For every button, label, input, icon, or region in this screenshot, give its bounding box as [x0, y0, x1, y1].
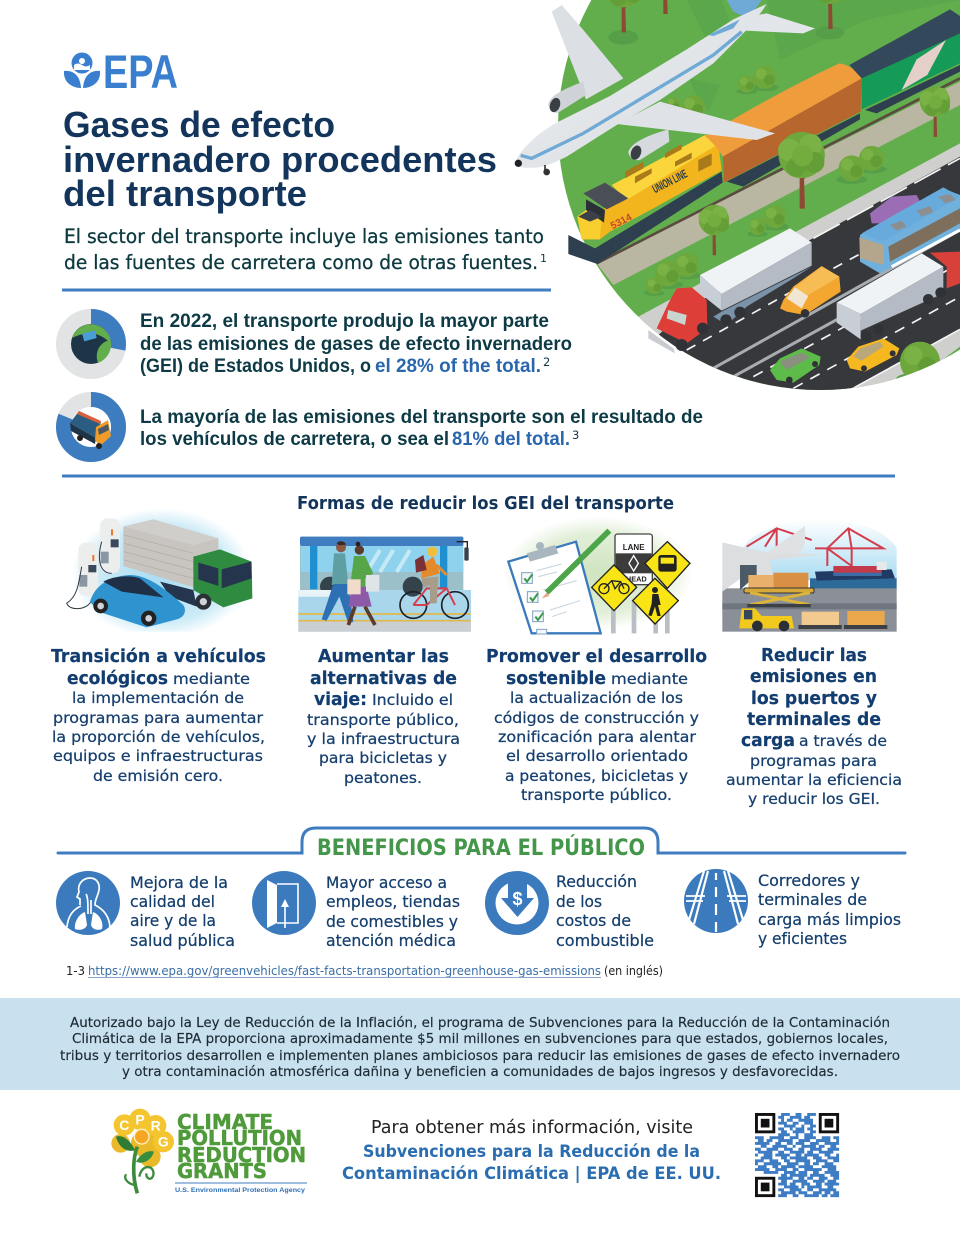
illustration: sustainable development: AHEAD	[621, 575, 647, 584]
benefit 3 text: Reducción	[556, 872, 637, 891]
CPRG wordmark: U.S. Environmental Protection Agency	[175, 1187, 305, 1194]
column 4 text: programas para	[750, 752, 877, 770]
column 2 text: peatones.	[344, 769, 422, 787]
stat 1 text: el 28% of the total.	[375, 356, 541, 377]
illustration: alternatives with bus, walkers and cyclist	[298, 537, 471, 632]
locomotive	[568, 135, 723, 264]
more information text: Contaminación Climática | EPA de EE. UU.	[342, 1164, 721, 1184]
title	[63, 104, 497, 214]
stat 2 text: los vehículos de carretera, o sea el	[140, 429, 449, 450]
benefit 4 text	[758, 871, 901, 948]
bus	[859, 187, 960, 273]
benefit 2 text: atención médica	[326, 931, 456, 950]
illustration: ports and terminals	[722, 519, 897, 632]
benefit 3 text: de los	[556, 892, 602, 911]
CPRG wordmark	[175, 1110, 307, 1194]
CPRG flower logo: R	[151, 1118, 161, 1134]
stat 1 text: (GEI) de Estados Unidos, o	[140, 356, 371, 377]
more information text: Subvenciones para la Reducción de la	[363, 1142, 700, 1162]
illustration: transportation scene circle	[515, 0, 960, 393]
funding note band	[0, 998, 960, 1090]
icon: dollar down arrow: $	[512, 889, 523, 909]
illustration: electric vehicles	[67, 508, 257, 642]
icon: lungs and head	[56, 871, 120, 935]
truck 1	[648, 228, 812, 353]
title: invernadero procedentes	[63, 139, 497, 180]
illustration: sustainable development	[497, 517, 697, 643]
funding note band: Climática de la EPA proporciona aproximadamente $5 mil millones en subvenciones para que estados, gobiernos locales,	[72, 1031, 888, 1047]
benefits header tab: BENEFICIOS PARA EL PÚBLICO	[317, 833, 645, 861]
column 2 text: Aumentar las	[318, 647, 449, 667]
subtitle: 1	[540, 252, 547, 265]
subtitle: El sector del transporte incluye las emisiones tanto	[64, 225, 544, 248]
stat 1 text: En 2022, el transporte produjo la mayor parte	[140, 311, 549, 332]
icon: open door with arrow	[252, 871, 316, 935]
EPA logo: EPA	[103, 45, 178, 98]
CPRG wordmark: REDUCTION	[177, 1143, 306, 1167]
benefit 3 text	[556, 872, 654, 950]
illustration: sustainable development: LANE	[623, 543, 645, 552]
CPRG wordmark: GRANTS	[177, 1159, 267, 1183]
stat 1 donut	[64, 316, 118, 372]
benefit 2 text: de comestibles y	[326, 912, 458, 931]
CPRG wordmark: POLLUTION	[177, 1126, 302, 1150]
column 2 text: y la infraestructura	[307, 730, 460, 748]
benefit 1 text	[130, 873, 235, 950]
more information text	[342, 1118, 721, 1184]
icon: highway	[684, 869, 748, 933]
column 4 text: terminales de	[747, 710, 881, 730]
CPRG flower logo: G	[158, 1134, 169, 1150]
column 1 text: mediante	[173, 670, 250, 688]
road	[657, 157, 960, 393]
stat 1 text: 2	[543, 355, 550, 369]
funding note band: y otra contaminación atmosférica dañina y beneficien a comunidades de bajos ingresos y desfavorecidas.	[122, 1064, 838, 1080]
column 3 text: la actualización de los	[510, 689, 683, 707]
sidewalk	[638, 143, 960, 337]
column 3 text: sostenible	[506, 669, 606, 689]
benefit 4 text: terminales de	[758, 890, 867, 909]
car: yellow	[847, 338, 899, 372]
column 4 text: y reducir los GEI.	[748, 790, 880, 808]
footnote: https://www.epa.gov/greenvehicles/fast-facts-transportation-greenhouse-gas-emissions	[88, 964, 601, 978]
stat 2 text	[140, 407, 703, 450]
benefits header tab	[58, 828, 905, 861]
stat 1 text	[140, 311, 572, 377]
column 4 text: carga	[741, 731, 795, 751]
benefit 1 text: aire y de la	[130, 911, 216, 930]
column 4 text: aumentar la eficiencia	[726, 771, 902, 789]
benefit 3 text: combustible	[556, 931, 654, 950]
column 3 text: el desarrollo orientado	[506, 747, 688, 765]
benefit 2 text: empleos, tiendas	[326, 892, 460, 911]
CPRG flower logo: C	[119, 1117, 129, 1133]
freight car: green	[849, 9, 960, 113]
column 4 text: a través de	[799, 732, 887, 750]
subtitle	[64, 225, 547, 274]
stat 2 donut	[64, 400, 118, 454]
truck 2	[837, 252, 960, 341]
column 4 text	[726, 646, 902, 808]
icon: dollar down arrow	[485, 871, 549, 935]
section heading: ways to reduce: Formas de reducir los GEI del transporte	[297, 493, 674, 514]
bushes and trees	[751, 66, 779, 91]
column 4 text: los puertos y	[751, 689, 878, 709]
benefit 2 text: Mayor acceso a	[326, 873, 447, 892]
column 4 text: emisiones en	[750, 667, 877, 687]
footnote: 1-3	[66, 964, 85, 978]
column 2 text	[307, 647, 460, 787]
stat 1 text: de las emisiones de gases de efecto invernadero	[140, 334, 572, 355]
rail bed	[597, 82, 960, 285]
benefit 2 text	[326, 873, 460, 950]
benefit 4 text: carga más limpios	[758, 910, 901, 929]
CPRG flower logo	[111, 1109, 174, 1193]
benefit 1 text: salud pública	[130, 931, 235, 950]
more information text: Para obtener más información, visite	[371, 1118, 693, 1138]
benefit 4 text: y eficientes	[758, 929, 847, 948]
column 2 text: Incluido el	[372, 691, 453, 709]
column 3 text: Promover el desarrollo	[486, 647, 707, 667]
column 2 text: viaje:	[314, 690, 367, 710]
column 3 text: a peatones, bicicletas y	[505, 767, 688, 785]
QR code	[755, 1114, 839, 1196]
column 2 text: alternativas de	[310, 669, 457, 689]
stat 2 text: 81% del total.	[452, 429, 570, 450]
column 3 text: códigos de construcción y	[494, 709, 699, 727]
column 1 text: equipos e infraestructuras	[53, 747, 263, 765]
benefit 3 text: costos de	[556, 911, 631, 930]
benefit 1 text: calidad del	[130, 892, 215, 911]
CPRG wordmark: CLIMATE	[177, 1110, 273, 1134]
column 3 text: zonificación para alentar	[498, 728, 697, 746]
benefit 1 text: Mejora de la	[130, 873, 228, 892]
column 1 text: la implementación de	[72, 689, 244, 707]
title: Gases de efecto	[63, 104, 335, 145]
column 3 text	[486, 647, 707, 804]
column 1 text: ecológicos	[67, 669, 168, 689]
airplane	[515, 0, 815, 175]
stat 2 text: La mayoría de las emisiones del transporte son el resultado de	[140, 407, 703, 428]
column 1 text: Transición a vehículos	[51, 647, 266, 667]
column 2 text: para bicicletas y	[319, 749, 447, 767]
footnote: (en inglés)	[604, 964, 663, 978]
CPRG flower logo: P	[135, 1111, 145, 1127]
column 2 text: transporte público,	[307, 711, 459, 729]
column 1 text	[51, 647, 266, 785]
column 1 text: de emisión cero.	[93, 767, 223, 785]
column 4 text: Reducir las	[761, 646, 867, 666]
funding note band: tribus y territorios desarrollen e implementen planes ambiciosos para reducir las emisiones de gases de efecto invernadero	[60, 1049, 900, 1064]
freight car: orange	[705, 63, 862, 187]
locomotive: 5314	[609, 212, 634, 232]
column 3 text: transporte público.	[521, 786, 672, 804]
subtitle: de las fuentes de carretera como de otras fuentes.	[64, 251, 538, 274]
column 1 text: programas para aumentar	[53, 709, 264, 727]
title: del transporte	[63, 173, 307, 214]
van	[780, 266, 841, 318]
funding note band: Autorizado bajo la Ley de Reducción de la Inflación, el programa de Subvenciones para la Reducción de la Contaminación	[70, 1015, 890, 1031]
locomotive: UNION LINE	[650, 167, 690, 196]
stat 2 text: 3	[572, 428, 579, 442]
EPA logo	[64, 45, 178, 98]
benefit 4 text: Corredores y	[758, 871, 860, 890]
column 3 text: mediante	[611, 670, 688, 688]
column 1 text: la proporción de vehículos,	[52, 728, 265, 746]
car: green	[770, 348, 821, 383]
